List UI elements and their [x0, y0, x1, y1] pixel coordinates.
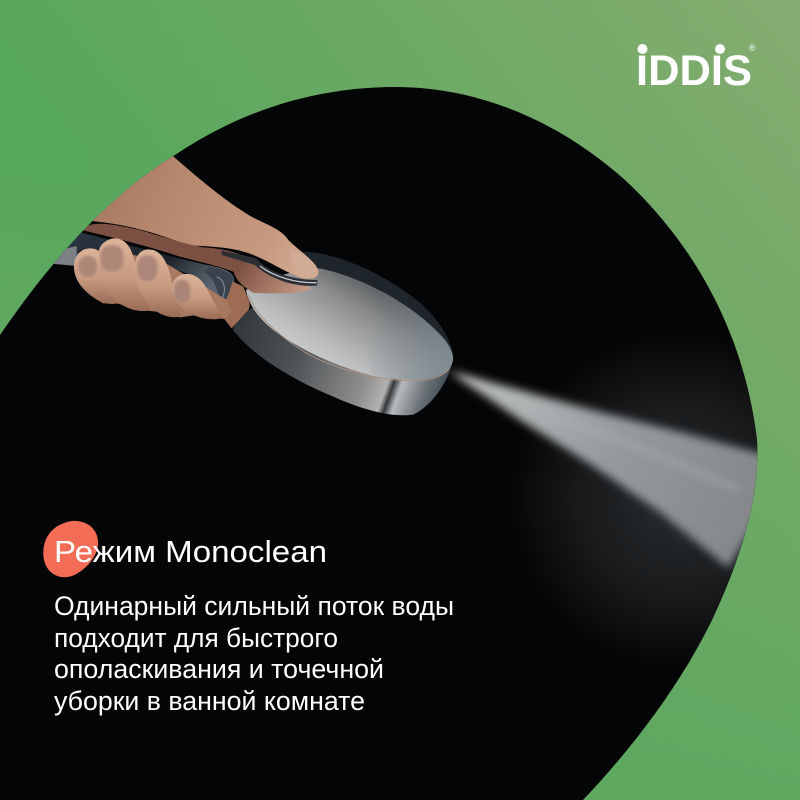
thumb nail	[290, 250, 300, 266]
water spray	[448, 338, 758, 670]
face right shading	[372, 304, 453, 380]
hand back and thumb	[80, 155, 319, 279]
finger mass shadow	[97, 254, 232, 319]
face copper edge	[248, 295, 449, 381]
shower head rear rim	[300, 252, 453, 360]
middle finger	[135, 249, 182, 317]
thumb clip button	[222, 251, 317, 286]
reflected hand on handle	[82, 224, 312, 293]
shower handle	[56, 232, 234, 295]
handle highlight	[204, 266, 233, 300]
logo: IDDIS: IDDIS	[636, 47, 752, 95]
ring finger	[98, 238, 151, 311]
heading: Режим Monoclean	[54, 534, 327, 569]
description text: уборки в ванной комнате	[54, 686, 365, 716]
coral accent blob	[43, 521, 98, 577]
description text	[54, 591, 454, 716]
shower head front face	[246, 268, 453, 380]
description text: подходит для быстрого	[54, 623, 338, 653]
description text: Одинарный сильный поток воды	[54, 591, 454, 621]
palm under head	[224, 281, 250, 328]
index finger	[172, 274, 224, 319]
shower head side band	[233, 304, 453, 415]
pinky finger	[74, 248, 117, 304]
logo: IDDIS: ®	[749, 43, 756, 53]
description text: ополаскивания и точечной	[54, 654, 384, 684]
photo: hand holding shower head with water spray	[40, 155, 800, 670]
